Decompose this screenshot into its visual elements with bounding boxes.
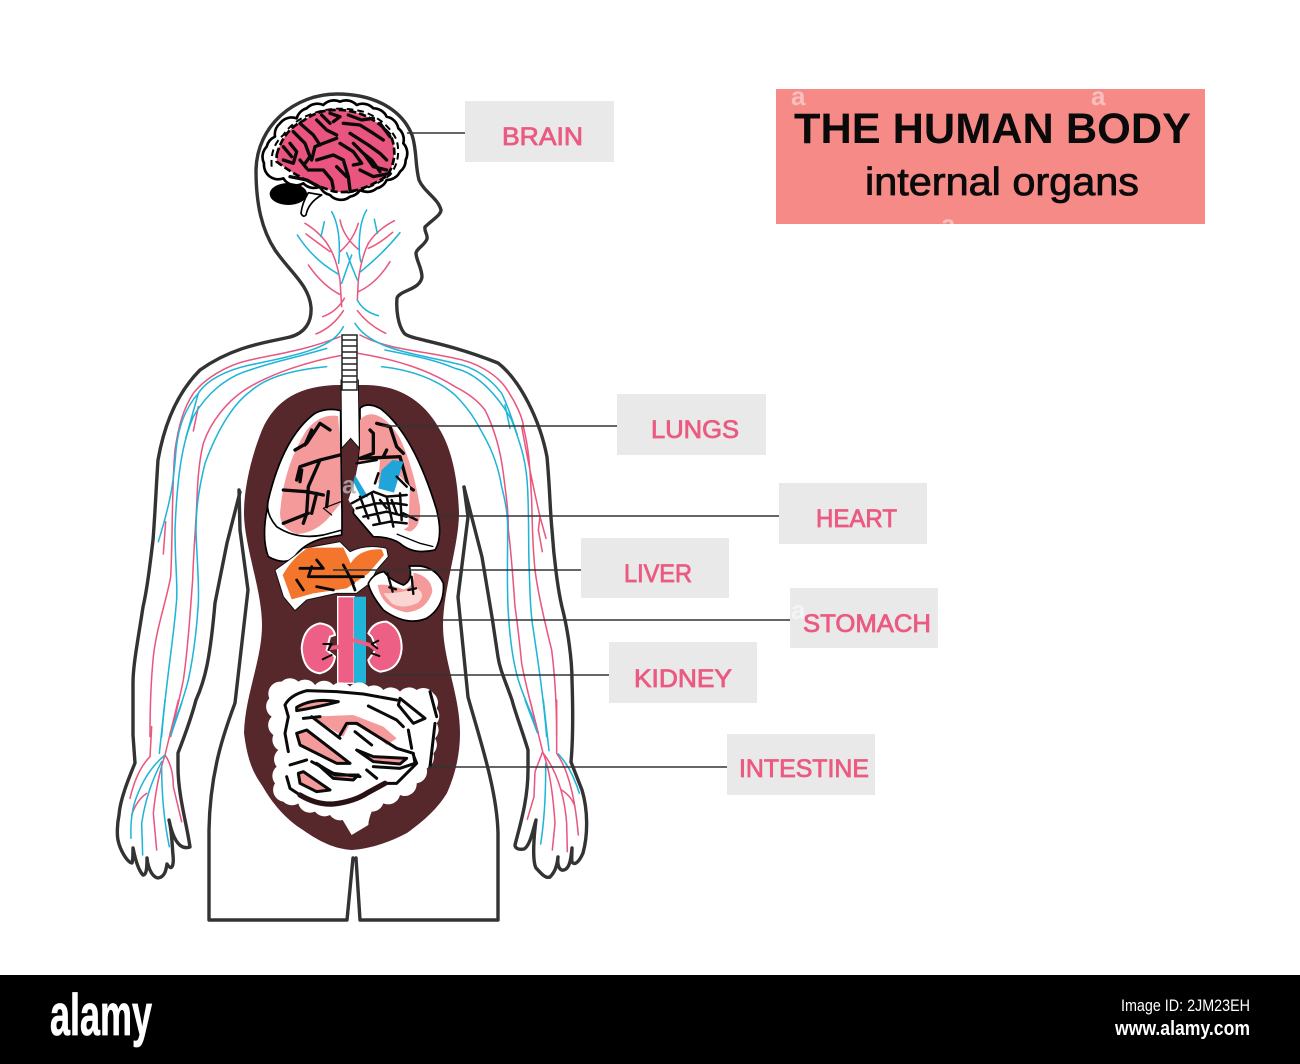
leader line: kidney xyxy=(378,674,609,676)
right pleural sac and lung xyxy=(353,405,440,551)
brain sulci xyxy=(283,113,390,190)
brain outer folds xyxy=(263,100,407,200)
right kidney xyxy=(368,622,402,672)
label: intestine xyxy=(727,734,875,795)
left shoulder and arm vessels xyxy=(150,327,343,737)
left bronchial tree xyxy=(283,423,340,523)
title heading: THE HUMAN BODY xyxy=(794,105,1191,153)
loop five xyxy=(298,772,330,792)
heart blue vessels xyxy=(353,460,403,497)
left pleural sac xyxy=(264,503,342,561)
left lung xyxy=(268,409,342,536)
organ: intestine xyxy=(266,678,439,835)
left lung fine branch xyxy=(323,502,341,515)
vena cava xyxy=(354,597,366,683)
loop three xyxy=(297,730,350,763)
intestine outer shape xyxy=(266,678,439,835)
left lung tissue xyxy=(280,416,341,534)
subtitle: internal organs xyxy=(865,161,1139,204)
veins and arteries: neck and shoulders xyxy=(130,210,579,855)
label: brain: BRAIN xyxy=(502,123,583,151)
body outline xyxy=(117,94,587,920)
lower right lung line xyxy=(397,534,433,547)
watermark mark: a xyxy=(342,472,356,499)
label: heart: HEART xyxy=(816,505,897,533)
watermark marks: a xyxy=(791,81,806,111)
renal vessels xyxy=(328,640,377,651)
brain fold inner ring xyxy=(271,109,398,193)
head, neck and right arm outline xyxy=(256,94,587,877)
right lung tissue xyxy=(357,414,420,532)
label: kidney xyxy=(609,642,757,703)
watermark marks: a xyxy=(941,209,956,239)
cerebellum xyxy=(270,183,307,205)
label: intestine: INTESTINE xyxy=(739,755,869,783)
loop one xyxy=(297,700,338,711)
dark torso cavity backdrop xyxy=(244,385,460,850)
right torso side outline xyxy=(356,487,498,920)
liver orange tissue xyxy=(283,548,384,599)
brain stem xyxy=(301,193,322,216)
label: liver: LIVER xyxy=(624,560,692,588)
intestine black contour lines xyxy=(285,691,437,795)
organ: brain xyxy=(263,100,407,216)
trachea rings xyxy=(342,340,357,382)
stomach light inner xyxy=(383,588,422,607)
organ: liver xyxy=(275,542,388,611)
organ: trachea xyxy=(342,335,357,390)
website: www.alamy.com xyxy=(1114,1018,1250,1040)
label: kidney: KIDNEY xyxy=(634,665,732,693)
aorta xyxy=(338,597,354,683)
left arm outline xyxy=(117,337,290,878)
intestine lower dark loop xyxy=(300,783,385,804)
left hand vessels xyxy=(130,700,182,855)
trachea tube xyxy=(342,335,357,390)
watermark marks xyxy=(791,81,1106,239)
heart white chambers xyxy=(348,460,410,534)
left kidney xyxy=(302,623,335,673)
leader line: heart xyxy=(403,515,779,517)
stomach veins xyxy=(387,573,416,594)
stomach pink lining xyxy=(378,573,432,612)
liver outer shape xyxy=(275,542,388,611)
leader line: intestine xyxy=(428,766,727,768)
footer logo: alamy xyxy=(50,983,152,1048)
right bronchial tree xyxy=(360,423,413,490)
small intestine pink loops xyxy=(297,700,407,792)
organs: lungs and heart xyxy=(264,380,440,561)
heart black muscle pattern xyxy=(352,460,417,527)
title panel xyxy=(776,81,1205,239)
leader line: brain xyxy=(407,132,465,134)
label: lungs xyxy=(617,394,766,455)
label: stomach: STOMACH xyxy=(803,610,931,638)
label: lungs: LUNGS xyxy=(651,416,739,444)
label: brain xyxy=(465,101,614,162)
loop six xyxy=(317,763,358,780)
leader line: liver xyxy=(333,569,581,571)
label: liver xyxy=(581,538,729,598)
upper airway tube xyxy=(341,380,359,448)
leader line: stomach xyxy=(440,619,790,621)
label: stomach: a xyxy=(791,595,806,625)
right hand vessels xyxy=(525,700,579,852)
right shoulder and arm vessels xyxy=(355,323,557,737)
label: heart xyxy=(779,483,927,544)
large pink loop xyxy=(312,715,397,745)
kidney pelvis marks xyxy=(323,641,379,659)
label: stomach xyxy=(790,588,938,648)
loop four xyxy=(357,750,407,764)
footer bar xyxy=(0,975,1300,1064)
head vessels xyxy=(297,210,400,334)
liver ducts xyxy=(297,560,363,590)
organs: kidneys and great vessels xyxy=(302,597,402,683)
leader line: lungs xyxy=(382,425,617,427)
organ: stomach xyxy=(368,566,443,621)
torso sides and legs outline xyxy=(209,490,353,920)
stomach sac xyxy=(368,566,443,621)
brain pink cortex xyxy=(277,110,394,192)
image id: Image ID: 2JM23EH xyxy=(1121,996,1250,1015)
watermark marks: a xyxy=(1091,81,1106,111)
